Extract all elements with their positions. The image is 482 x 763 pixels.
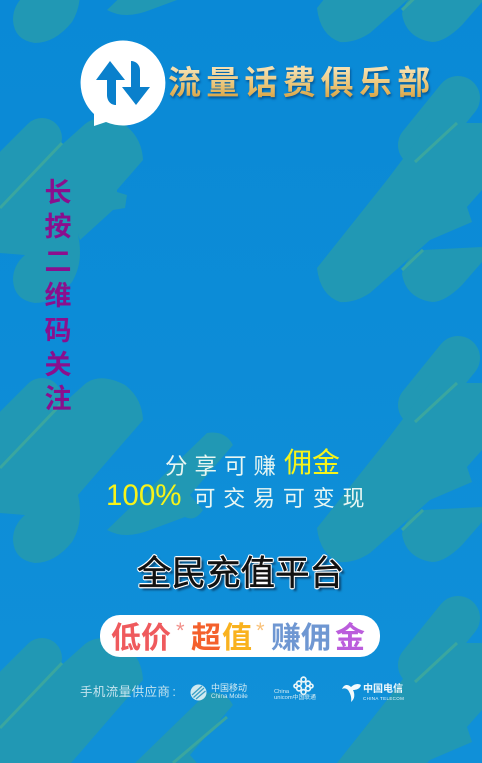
bubble	[81, 40, 165, 126]
slogan text: 低	[111, 622, 141, 655]
unicom name: China	[274, 689, 289, 695]
logo: China Mobile	[190, 683, 248, 700]
slogan text: 金	[335, 622, 365, 655]
text: share line: 佣金	[284, 447, 340, 478]
title: 流量话费俱乐部	[168, 64, 435, 101]
telecom name: 中国电信	[363, 684, 403, 695]
text: 100% line: 100% 可交易可变现	[106, 479, 372, 512]
vertical text: long press QR code: 码	[44, 316, 72, 346]
unicom name: unicom中国联通	[274, 695, 316, 701]
vertical text: long press QR code: 关	[44, 350, 72, 380]
text: suppliers label: 手机流量供应商:	[80, 685, 176, 699]
mobile english: China Mobile	[211, 693, 248, 700]
logo: China Unicom	[274, 676, 316, 701]
vertical text: long press QR code: 二	[44, 247, 72, 277]
vertical text: long press QR code: 长	[44, 178, 72, 208]
slogan text: *	[176, 618, 185, 643]
slogan text: 超	[191, 622, 221, 655]
slogan text: 佣	[301, 622, 331, 655]
vertical text: long press QR code: 维	[44, 281, 72, 311]
logo: China Telecom	[342, 683, 404, 702]
slogan text: 值	[222, 622, 252, 655]
unicom name	[274, 689, 316, 701]
logo: chat bubble with arrows	[80, 40, 166, 126]
telecom english: CHINA TELECOM	[363, 696, 404, 701]
vertical text: long press QR code: 按	[44, 212, 72, 242]
arrows	[96, 61, 125, 105]
icon: mobile swirl	[190, 684, 206, 700]
slogan text: *	[256, 618, 265, 643]
text: share line: 分享可赚	[165, 454, 283, 479]
slogan text: 价	[141, 622, 171, 655]
text: share line	[165, 447, 340, 479]
mobile name: 中国移动	[211, 683, 247, 693]
slogan text	[111, 618, 365, 655]
heading: national recharge platform: 全民充值平台	[137, 555, 344, 593]
vertical text: long press QR code: 注	[44, 384, 72, 414]
vertical text: long press QR code	[44, 178, 72, 414]
icon: unicom knot	[293, 676, 314, 696]
icon: telecom	[342, 684, 361, 702]
slogan text: 赚	[271, 622, 301, 655]
pill: slogans	[100, 615, 380, 657]
